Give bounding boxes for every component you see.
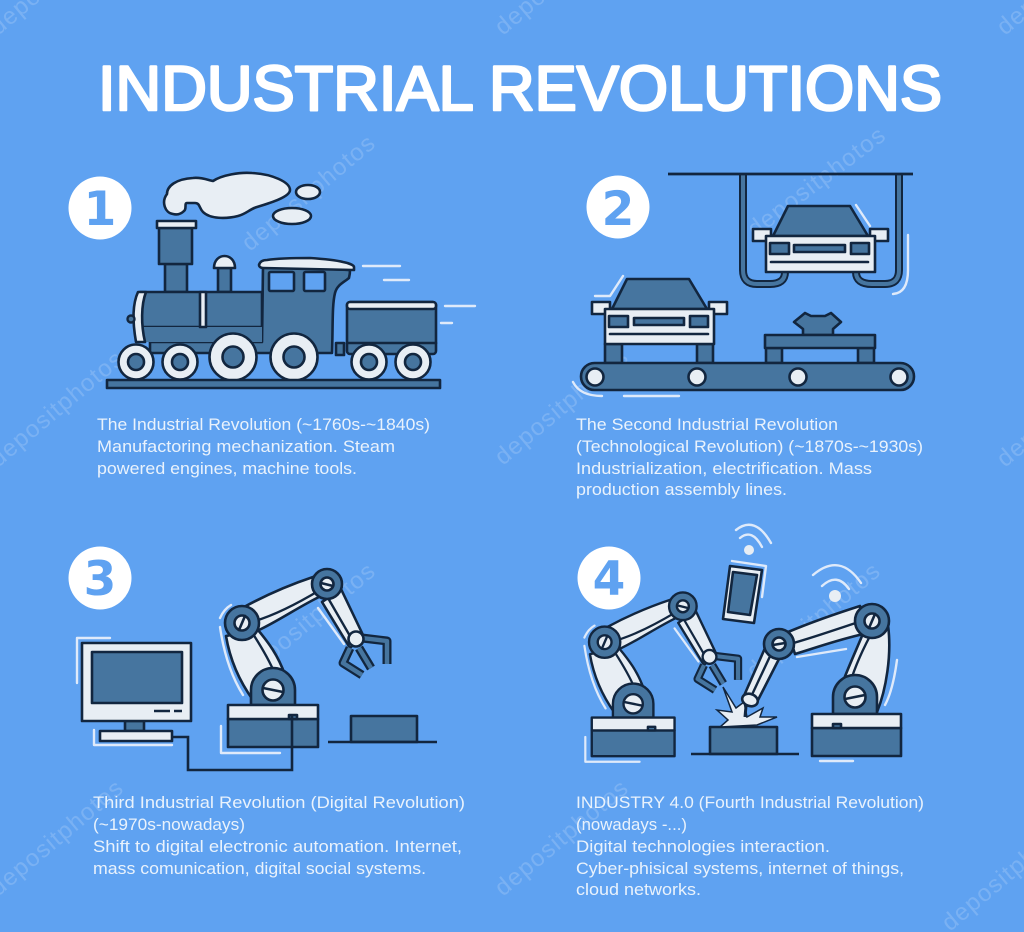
text block: third revolution (93, 794, 465, 878)
icon: robot arm (220, 569, 387, 753)
icon: left robot arm (584, 592, 738, 762)
badge: number 4 (578, 546, 640, 610)
text block: fourth revolution (576, 794, 924, 899)
badge: number 4: 4 (593, 552, 625, 607)
text block: first revolution: Manufactoring mechanization. Steam (97, 438, 395, 456)
icon: right robot arm with wifi (740, 565, 901, 761)
panel: first revolution (68, 173, 475, 478)
panel: second revolution (573, 174, 923, 499)
text block: second revolution: production assembly lines. (576, 481, 787, 499)
title: INDUSTRIAL REVOLUTIONS (98, 54, 942, 124)
panel: third revolution (68, 546, 465, 878)
text block: fourth revolution: Cyber-phisical systems, internet of things, (576, 860, 904, 878)
icon: steam locomotive (107, 173, 475, 388)
text: depositphotos (490, 775, 633, 902)
badge: number 1 (68, 176, 132, 240)
text block: third revolution: mass comunication, digital social systems. (93, 860, 426, 878)
icon: tablet with wifi (723, 525, 771, 623)
text block: first revolution: The Industrial Revolution (~1760s-~1840s) (97, 416, 430, 434)
badge: number 3: 3 (84, 552, 116, 607)
icon: computer (77, 638, 191, 745)
text block: second revolution: Industrialization, electrification. Mass (576, 460, 872, 478)
text: depositphotos (742, 122, 890, 243)
badge: number 3 (68, 546, 132, 610)
icon: workpiece (328, 716, 437, 742)
text block: second revolution: The Second Industrial Revolution (576, 416, 838, 434)
text block: second revolution (576, 416, 923, 499)
icon: assembly line with cars (573, 174, 914, 396)
text block: first revolution: powered engines, machine tools. (97, 460, 357, 478)
text block: third revolution: Third Industrial Revolution (Digital Revolution) (93, 794, 465, 812)
badge: number 2: 2 (602, 182, 634, 237)
badge: number 1: 1 (84, 182, 116, 237)
text: depositphotos (237, 130, 380, 257)
badge: number 2 (586, 176, 650, 238)
text block: fourth revolution: Digital technologies interaction. (576, 838, 830, 856)
text block: fourth revolution: cloud networks. (576, 881, 701, 899)
text: depositphotos (490, 344, 633, 471)
text block: third revolution: (~1970s-nowadays) (93, 816, 245, 834)
cable (172, 716, 292, 770)
icon: welding spark and workpiece (691, 687, 799, 754)
panel: fourth revolution (576, 525, 924, 899)
text block: fourth revolution: INDUSTRY 4.0 (Fourth Industrial Revolution) (576, 794, 924, 812)
text block: third revolution: Shift to digital electronic automation. Internet, (93, 838, 462, 856)
text block: first revolution (97, 416, 430, 478)
text: depositphotos (742, 558, 885, 685)
text block: second revolution: (Technological Revolution) (~1870s-~1930s) (576, 438, 923, 456)
text block: fourth revolution: (nowadays -...) (576, 816, 687, 834)
text: depositphotos (237, 558, 380, 685)
